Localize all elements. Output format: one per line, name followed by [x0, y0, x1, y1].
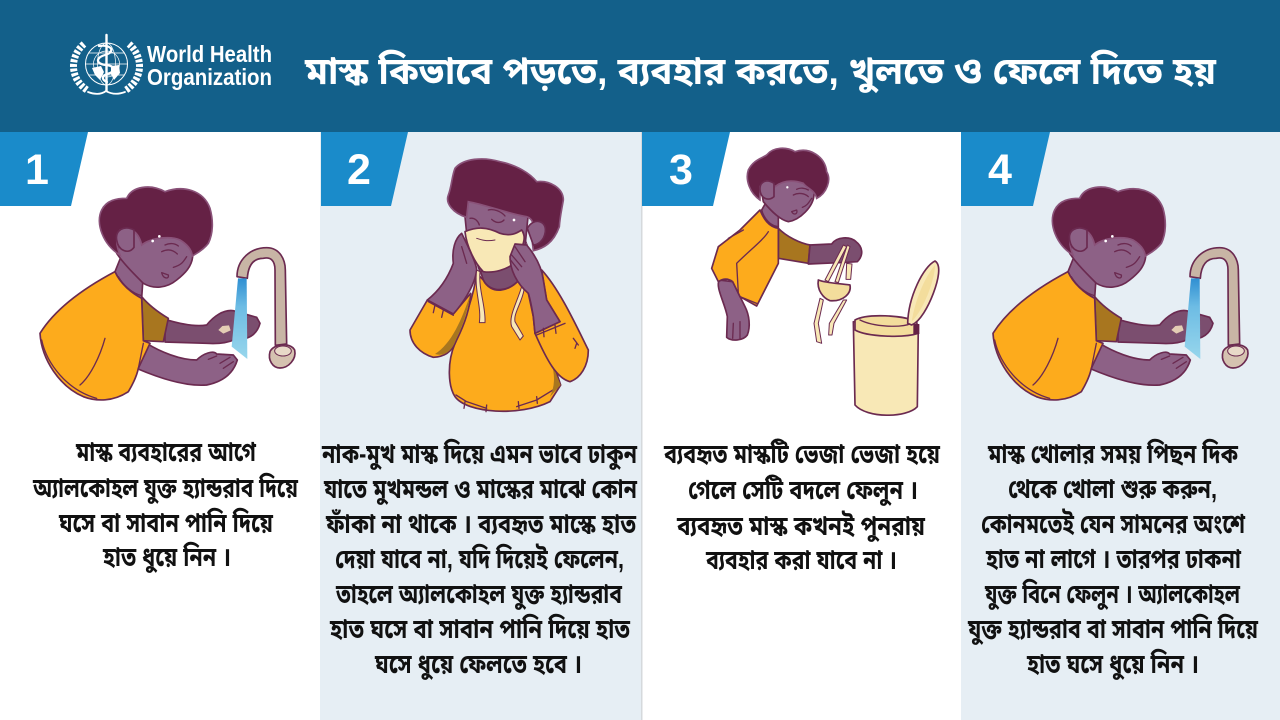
illustration: washing hands again: [993, 187, 1248, 400]
logo wordmark: World Health: [147, 41, 272, 67]
text: step 3: ব্যবহৃত মাস্ক কখনই পুনরায়: [676, 510, 925, 543]
panel 3: discard the mask: [642, 132, 939, 415]
step badge 3: [642, 132, 730, 206]
text: step 1: অ্যালকোহল যুক্ত হ্যান্ডরাব দিয়ে: [32, 472, 298, 505]
text: step 4: হাত ঘসে ধুয়ে নিন ।: [1026, 648, 1199, 681]
text: step 2: ফাঁকা না থাকে । ব্যবহৃত মাস্কে হাত: [325, 509, 637, 539]
icon: WHO emblem: [73, 35, 140, 94]
text: step 3: ব্যবহার করা যাবে না ।: [705, 545, 897, 575]
text: step 1: ঘসে বা সাবান পানি দিয়ে: [58, 507, 273, 538]
step badge 2: 2: [347, 146, 371, 194]
header band: [0, 0, 1280, 132]
illustration: putting on mask: [410, 159, 588, 412]
panel 2: wear the mask: [321, 132, 588, 412]
illustration: dropping mask in bin: [712, 148, 939, 415]
logo: World Health Organization: [73, 35, 272, 94]
text: step 2: যাতে মুখমন্ডল ও মাস্কের মাঝে কোন: [323, 474, 638, 506]
panel 4: remove mask and wash: [961, 132, 1248, 400]
step badge 3: 3: [669, 146, 693, 194]
step badge 4: 4: [988, 146, 1012, 194]
panel 1: wash hands before: [0, 132, 295, 400]
text: step 2: দেয়া যাবে না, যদি দিয়েই ফেলেন,: [335, 543, 624, 574]
logo wordmark: Organization: [147, 64, 272, 90]
text: step 2: তাহলে অ্যালকোহল যুক্ত হ্যান্ডরাব: [335, 579, 623, 611]
illustration: washing hands: [40, 187, 295, 400]
text: step 4: [967, 438, 1258, 681]
text: step 2: নাক-মুখ মাস্ক দিয়ে এমন ভাবে ঢাকুন: [321, 438, 638, 471]
text: step 2: ঘসে ধুয়ে ফেলতে হবে ।: [374, 649, 582, 681]
title: মাস্ক কিভাবে পড়তে, ব্যবহার করতে, খুলতে ও ফেলে দিতে হয়: [304, 49, 1217, 94]
text: step 1: মাস্ক ব্যবহারের আগে: [75, 437, 256, 467]
step badge 1: 1: [25, 146, 49, 194]
text: step 3: ব্যবহৃত মাস্কটি ভেজা ভেজা হয়ে: [663, 438, 940, 469]
text: step 2: [321, 438, 638, 681]
text: step 2: হাত ঘসে বা সাবান পানি দিয়ে হাত: [329, 613, 631, 644]
text: step 1: [32, 437, 298, 574]
text: step 1: হাত ধুয়ে নিন ।: [102, 541, 231, 574]
step badge 2: [321, 132, 408, 206]
step badge 1: [0, 132, 88, 206]
panel backgrounds: [320, 132, 1280, 720]
text: step 4: থেকে খোলা শুরু করুন,: [1008, 474, 1217, 504]
text: step 3: গেলে সেটি বদলে ফেলুন ।: [688, 474, 918, 507]
logo wordmark: [147, 41, 272, 90]
step badge 4: [961, 132, 1050, 206]
text: step 3: [663, 438, 940, 575]
